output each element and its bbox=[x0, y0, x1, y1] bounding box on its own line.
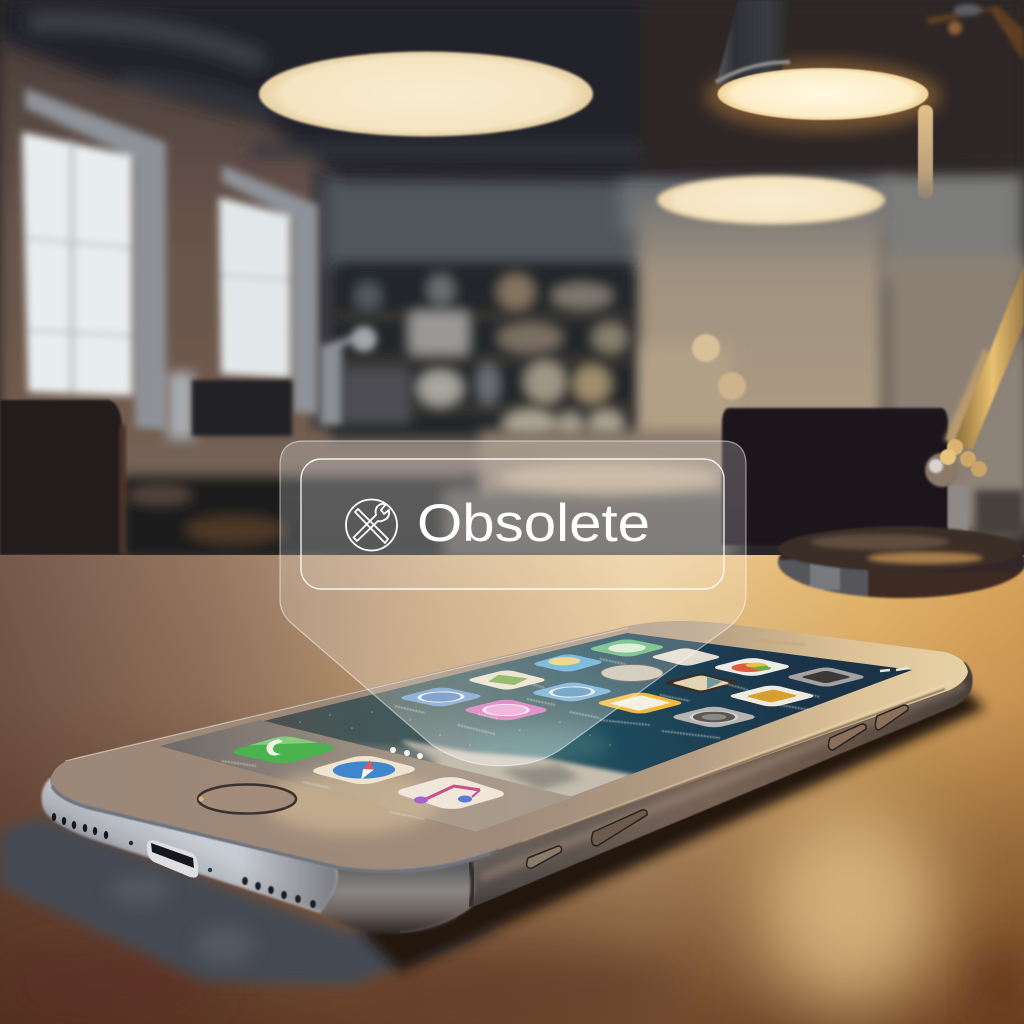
silver fade into corner bbox=[240, 840, 338, 913]
app icon: compass bbox=[306, 754, 422, 786]
handset glyph bbox=[266, 739, 283, 755]
left chair bbox=[0, 400, 122, 555]
outer speech bubble bbox=[280, 441, 746, 766]
side wall highlight bbox=[480, 684, 965, 878]
phone shadow: long dark side bbox=[360, 690, 985, 972]
smartphone bbox=[42, 621, 973, 934]
app icon: wallet bbox=[661, 672, 741, 694]
app icon: maps bbox=[465, 669, 549, 691]
bookshelf bbox=[333, 265, 632, 443]
brass chamfer along long edge bbox=[522, 682, 952, 842]
grey-blue chamfer along front edge bbox=[52, 786, 500, 871]
far desk, monitor and shelving under desk bbox=[120, 372, 735, 560]
app icon: settings bbox=[668, 705, 760, 729]
page dots bbox=[390, 747, 423, 759]
blurred wall sconce near window bbox=[320, 326, 377, 425]
blurred app labels bbox=[222, 659, 820, 819]
table surface bbox=[0, 555, 1024, 1024]
ceiling lamp: left bbox=[259, 52, 593, 136]
glass highlight bbox=[65, 628, 628, 761]
icon: crossed wrench and screwdriver bbox=[346, 500, 397, 550]
grey rear wall bbox=[325, 178, 655, 268]
speaker grille: left bbox=[52, 813, 108, 839]
warm wall panel right bbox=[636, 200, 886, 445]
window: middle bbox=[219, 165, 318, 415]
app icon: files bbox=[726, 684, 818, 708]
app icon: photos bbox=[710, 657, 794, 677]
speaker grille: right bbox=[242, 877, 316, 908]
warm reflection below dock bbox=[264, 770, 440, 834]
wallpaper snow, mountains and speckle bbox=[299, 711, 640, 800]
monitor bbox=[192, 380, 292, 436]
silver bottom edge bbox=[42, 778, 338, 913]
app icon: camera bbox=[784, 666, 868, 688]
app icon: app store bbox=[396, 686, 486, 708]
background: blurred office room bbox=[0, 0, 1024, 560]
app icon: phone bbox=[227, 735, 341, 765]
wall spotlights bbox=[692, 334, 720, 362]
left wall bbox=[0, 30, 335, 560]
dock icons bbox=[227, 735, 511, 811]
label: obsolete: Obsolete bbox=[417, 494, 650, 553]
glass callout: obsolete bbox=[280, 441, 746, 766]
app icon: music bbox=[391, 775, 511, 811]
mic hole bbox=[129, 841, 133, 845]
phone shadow: blue-grey plane on table bbox=[0, 818, 500, 985]
inner glass panel bbox=[301, 459, 724, 589]
ceiling bbox=[0, 0, 1024, 176]
charging port bbox=[147, 840, 198, 878]
music note glyph bbox=[414, 786, 480, 804]
app icon: music pink bbox=[460, 698, 552, 722]
ceiling lamp: rear bbox=[657, 176, 885, 224]
volume button: upper bbox=[875, 705, 908, 730]
ceiling fixture arm: top right bbox=[925, 4, 1024, 62]
ceiling lamp: right with shade bbox=[705, 0, 941, 199]
app icon: messages bbox=[586, 638, 668, 658]
home button bbox=[198, 784, 296, 814]
desk lamp bbox=[778, 265, 1024, 602]
lamp base bbox=[778, 526, 1024, 602]
earpiece bbox=[755, 640, 805, 645]
dock area bbox=[160, 720, 573, 832]
volume button: lower bbox=[829, 724, 866, 750]
app icon: blue compass bbox=[528, 681, 616, 703]
rear corner metal bbox=[318, 862, 474, 934]
phone front glass bbox=[50, 621, 968, 871]
app icon grid bbox=[396, 638, 868, 729]
app icon: notes bbox=[649, 647, 723, 667]
app icon: mail yellow bbox=[594, 691, 686, 715]
screen wallpaper bbox=[160, 633, 912, 832]
antenna seam bbox=[470, 862, 473, 907]
side switch bbox=[527, 846, 562, 868]
screw hole bbox=[208, 868, 212, 872]
side button: power bbox=[592, 810, 647, 846]
app icon: weather bbox=[530, 653, 606, 673]
window: left bbox=[22, 88, 166, 430]
status indicators bbox=[880, 668, 909, 671]
right chair bbox=[722, 408, 948, 545]
app icon: clock bbox=[601, 664, 663, 682]
phone side wall bbox=[400, 662, 973, 933]
